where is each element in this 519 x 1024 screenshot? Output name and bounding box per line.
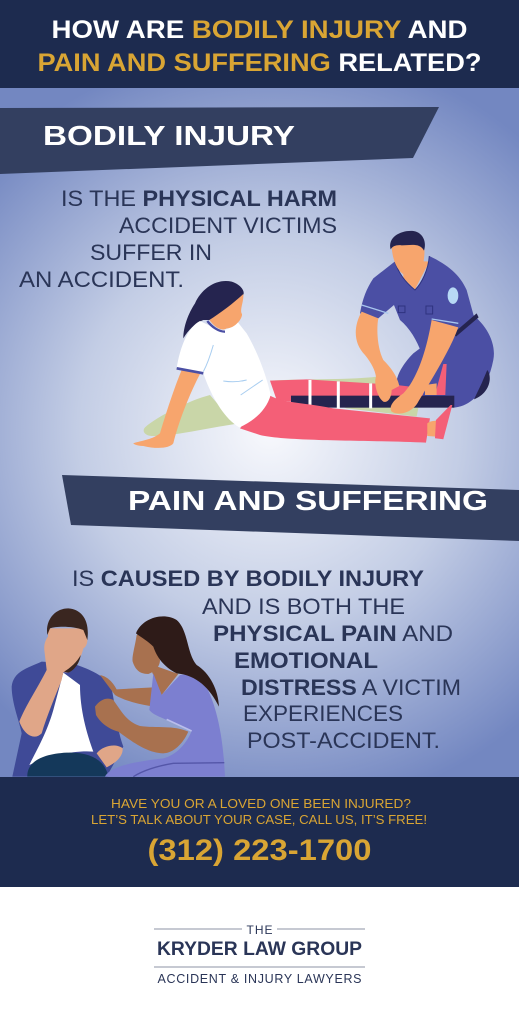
man beard — [64, 655, 81, 673]
illustration: paramedic treating injured woman — [133, 231, 494, 448]
logo: the kryder law group: KRYDER LAW GROUP — [157, 939, 362, 960]
banner: bodily injury — [0, 107, 439, 174]
woman neck — [148, 663, 178, 695]
man jacket — [12, 662, 123, 777]
text block: bodily injury definition: IS THE PHYSICAL HARM — [61, 186, 337, 211]
belt — [453, 313, 479, 337]
logo: the kryder law group — [154, 923, 365, 986]
woman shirt — [177, 321, 271, 427]
text block: bodily injury definition — [19, 186, 337, 292]
man — [12, 608, 123, 777]
splint — [291, 396, 454, 408]
text block: pain and suffering definition: AND IS BOTH THE — [202, 594, 405, 619]
blanket — [144, 377, 418, 436]
text block: pain and suffering definition: EXPERIENCES — [243, 701, 403, 726]
woman hair — [136, 616, 219, 707]
call to action text: HAVE YOU OR A LOVED ONE BEEN INJURED? — [111, 796, 411, 811]
call to action band — [0, 777, 519, 887]
call to action band: LET’S TALK ABOUT YOUR CASE, CALL US, IT’S FREE! — [91, 812, 427, 827]
paramedic shirt — [360, 256, 474, 367]
title line 2: PAIN AND SUFFERING RELATED? — [38, 49, 481, 77]
text block: pain and suffering definition: EMOTIONAL — [234, 648, 378, 673]
banner: bodily injury: BODILY INJURY — [43, 120, 295, 151]
patient legs — [240, 364, 454, 443]
paramedic body — [360, 231, 494, 408]
illustration: woman comforting distressed man — [12, 608, 225, 777]
far arm — [356, 312, 399, 402]
paramedic trousers — [396, 310, 494, 408]
woman — [95, 616, 225, 777]
man hand and arm covering face — [19, 629, 73, 737]
logo: the kryder law group: ACCIDENT & INJURY LAWYERS — [158, 972, 362, 986]
near leg — [240, 393, 430, 443]
title line 1: HOW ARE BODILY INJURY AND — [52, 16, 468, 44]
text block: pain and suffering definition: PHYSICAL PAIN AND — [213, 621, 453, 646]
woman hair back — [183, 281, 244, 338]
text block: bodily injury definition: ACCIDENT VICTIMS — [119, 213, 337, 238]
woman top — [105, 673, 225, 777]
woman face — [132, 632, 160, 674]
man hair — [47, 608, 88, 640]
near arm — [391, 320, 458, 414]
hair — [390, 231, 425, 251]
far leg — [270, 379, 425, 407]
text block: pain and suffering definition — [72, 566, 461, 753]
logo: the kryder law group: THE — [246, 923, 272, 937]
banner: pain and suffering: PAIN AND SUFFERING — [128, 485, 488, 516]
head — [392, 240, 424, 277]
text block: pain and suffering definition: DISTRESS A VICTIM — [241, 675, 461, 700]
blue gradient panel — [0, 88, 519, 778]
man knee hand — [97, 746, 123, 767]
text block: pain and suffering definition: IS CAUSED BY BODILY INJURY — [72, 566, 424, 591]
patient upper body — [133, 281, 271, 448]
phone number: (312) 223-1700 — [148, 834, 372, 867]
text block: bodily injury definition: AN ACCIDENT. — [19, 267, 184, 292]
man t-shirt — [29, 673, 93, 765]
title band — [0, 0, 519, 88]
badge — [448, 287, 458, 304]
paramedic neck — [403, 260, 429, 289]
banner: pain and suffering — [62, 475, 519, 541]
text block: pain and suffering definition: POST-ACCIDENT. — [247, 728, 440, 753]
woman face — [209, 294, 243, 329]
man head — [48, 628, 88, 673]
man trousers — [27, 753, 108, 777]
woman back arm — [100, 675, 153, 706]
paramedic arms — [356, 312, 458, 414]
woman arm — [133, 370, 200, 448]
text block: bodily injury definition: SUFFER IN — [90, 240, 212, 265]
woman front arm — [95, 699, 188, 753]
splint straps — [310, 380, 371, 408]
